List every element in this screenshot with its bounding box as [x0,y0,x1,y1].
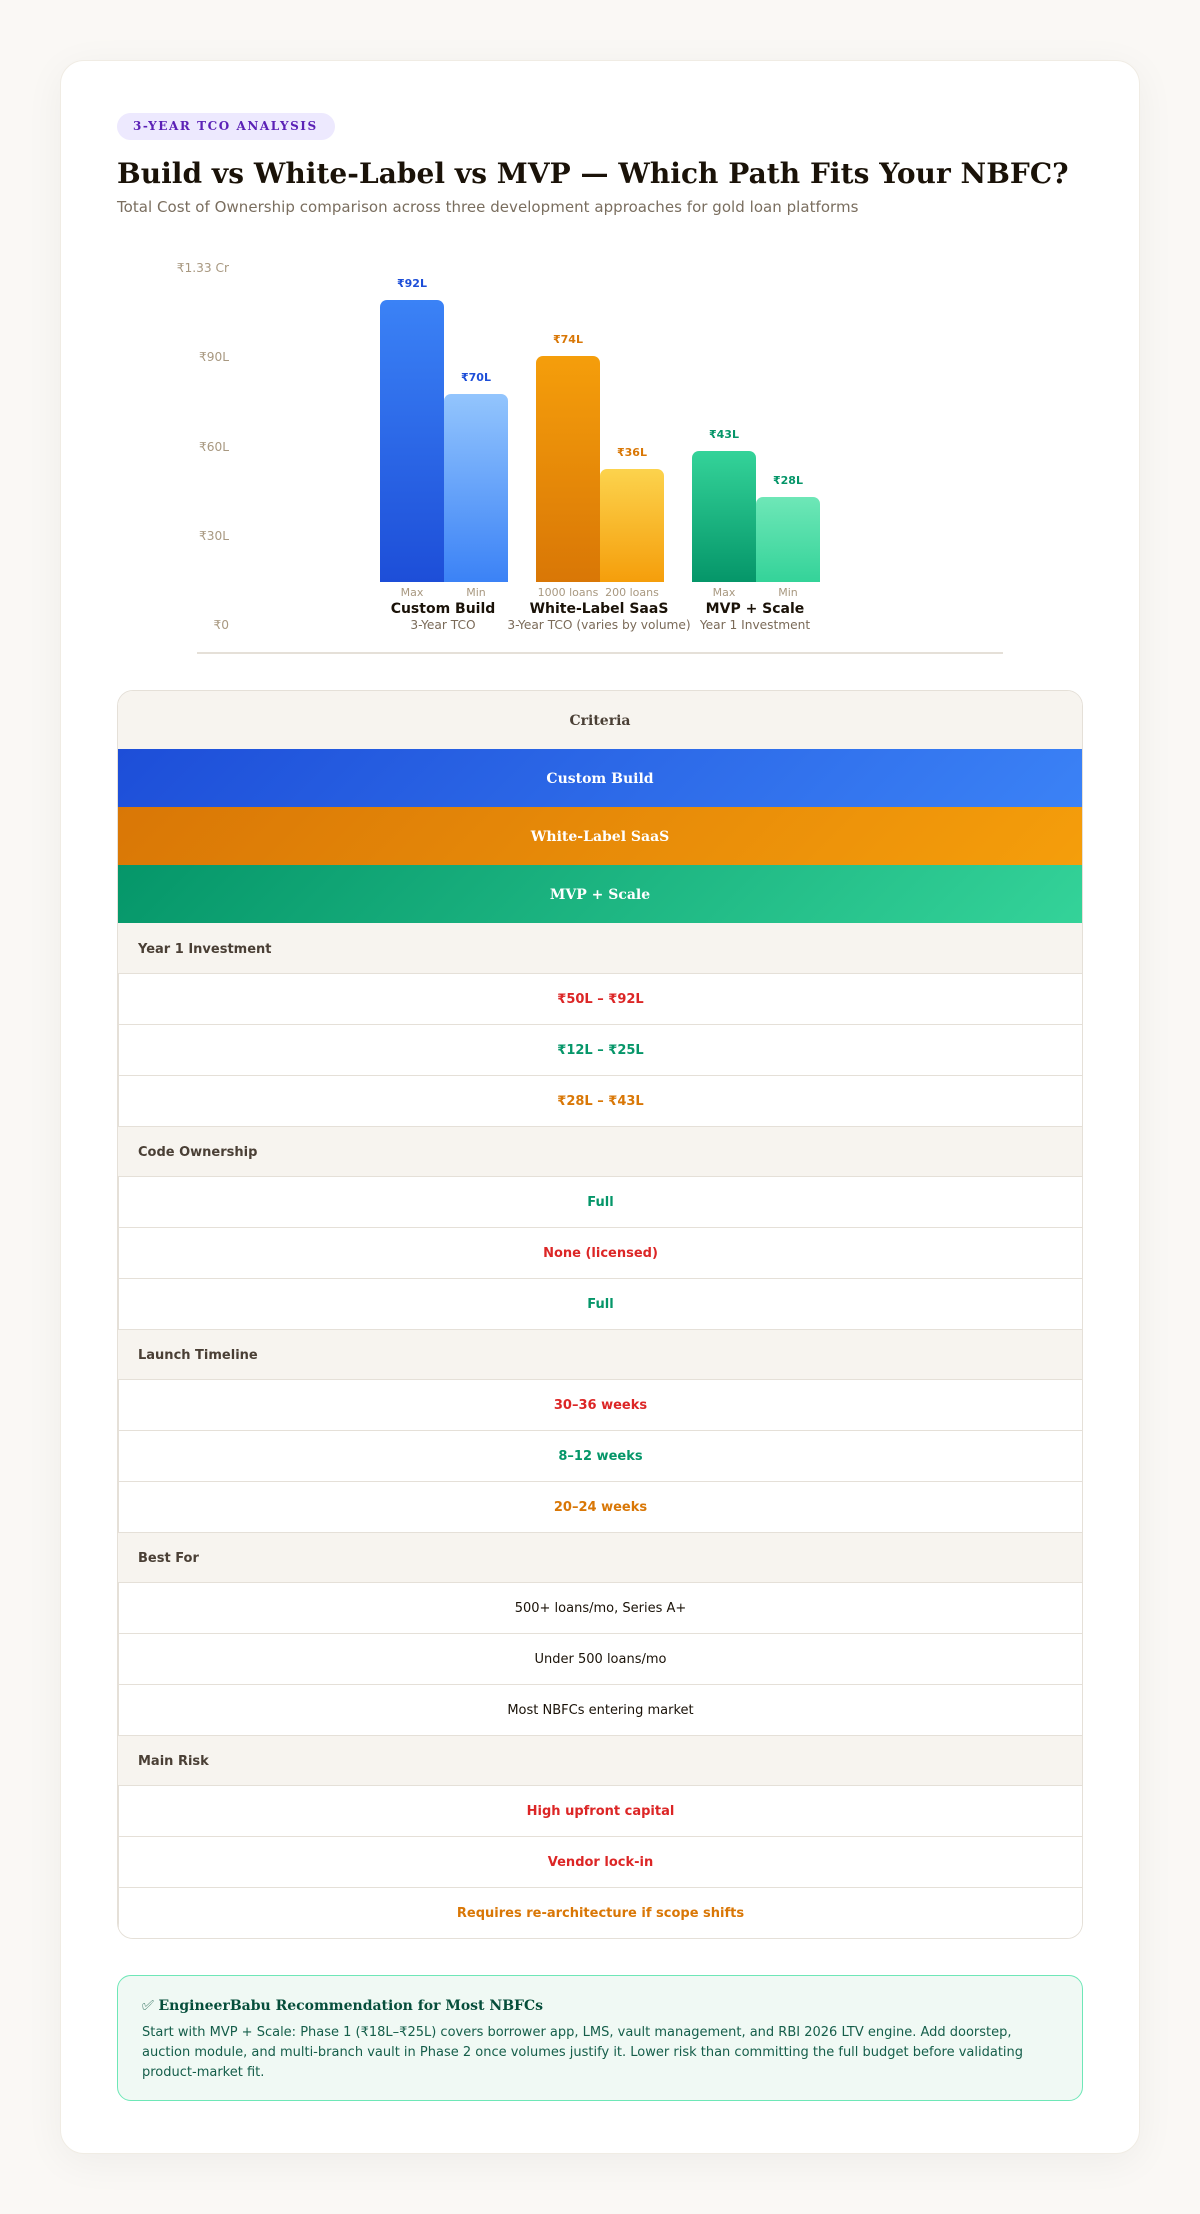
callout body: Start with MVP + Scale: Phase 1 (₹18L–₹25L) covers borrower app, LMS, vault management, and RBI 2026 LTV engine. Add doorstep, auction module, and multi-branch vault in Phase 2 once volumes justify it. Lower risk than committing the full budget before validating product-market fit. [142,2025,1023,2080]
callout heading: EngineerBabu Recommendation for Most NBFCs [158,1998,543,2014]
comparison table [117,690,1083,1939]
header: White-Label SaaS [118,807,1082,865]
group: Custom Build: Custom Build [391,601,495,617]
group: White-Label SaaS: ₹74L [553,333,583,346]
group: MVP + Scale: Min [778,586,798,599]
group: White-Label SaaS: 200 loans [605,586,659,599]
y axis labels: ₹1.33 Cr [177,261,229,275]
section: Launch Timeline: Launch Timeline [138,1348,258,1363]
x axis line [197,652,1003,654]
comparison table: Under 500 loans/mo [535,1652,666,1667]
group: Custom Build: ₹92L [397,277,427,290]
y axis labels: ₹30L [199,529,229,543]
group: MVP + Scale: MVP + Scale [706,601,804,617]
callout heading: ✅︎ [142,1998,154,2014]
section: Year 1 Investment: Year 1 Investment [138,942,272,957]
group: Custom Build [380,277,508,632]
y axis labels: ₹60L [199,440,229,454]
section: Year 1 Investment [118,923,1082,974]
group: MVP + Scale: Max [713,586,735,599]
group: Custom Build: Max [401,586,423,599]
title: Build vs White-Label vs MVP — Which Path Fits Your NBFC? [117,157,1069,190]
header: MVP + Scale [118,865,1082,923]
section: Main Risk: Main Risk [138,1754,209,1769]
y axis labels: ₹90L [199,350,229,364]
group: White-Label SaaS: White-Label SaaS [530,601,668,617]
comparison table: Full [587,1195,614,1210]
y axis labels [177,261,229,632]
comparison table: 30–36 weeks [554,1398,647,1413]
comparison table: Most NBFCs entering market [507,1703,694,1718]
section: Main Risk [118,1736,1082,1786]
comparison table: 8–12 weeks [558,1449,643,1464]
comparison table: ₹12L – ₹25L [557,1043,644,1058]
comparison table: Requires re-architecture if scope shifts [457,1906,744,1921]
group: Custom Build: Min [466,586,486,599]
badge: 3-YEAR TCO ANALYSIS [133,119,318,133]
group: White-Label SaaS: ₹36L [617,446,647,459]
group: MVP + Scale: Year 1 Investment [700,618,810,632]
comparison table: None (licensed) [543,1246,658,1261]
group: MVP + Scale: ₹28L [773,474,803,487]
comparison table: ₹50L – ₹92L [557,992,644,1007]
group: Custom Build: 3-Year TCO [410,618,476,632]
section: Best For: Best For [138,1551,199,1566]
group: MVP + Scale: ₹43L [709,428,739,441]
section: Launch Timeline [118,1330,1082,1380]
group: Custom Build: ₹70L [461,371,491,384]
group: MVP + Scale [692,428,820,632]
group: White-Label SaaS: 1000 loans [538,586,598,599]
comparison table: High upfront capital [527,1804,674,1819]
header: Criteria [118,691,1082,749]
header: Custom Build: Custom Build [546,771,654,787]
subtitle: Total Cost of Ownership comparison across three development approaches for gold loan platforms [117,198,858,216]
group: White-Label SaaS: 3-Year TCO (varies by volume) [507,618,691,632]
section: Code Ownership: Code Ownership [138,1145,257,1160]
comparison table: 500+ loans/mo, Series A+ [515,1601,686,1616]
header: White-Label SaaS: White-Label SaaS [531,829,669,845]
group: White-Label SaaS [507,333,691,632]
y axis labels: ₹0 [213,618,229,632]
comparison table: ₹28L – ₹43L [557,1094,644,1109]
header: Custom Build [118,749,1082,807]
comparison table: Vendor lock-in [548,1855,653,1870]
comparison table: 20–24 weeks [554,1500,647,1515]
header: MVP + Scale: MVP + Scale [550,887,650,903]
header: Criteria: Criteria [570,713,630,729]
section: Best For [118,1533,1082,1583]
comparison table: Full [587,1297,614,1312]
recommendation callout [117,1975,1083,2101]
section: Code Ownership [118,1127,1082,1177]
badge [117,113,335,140]
bar chart [177,261,1003,654]
